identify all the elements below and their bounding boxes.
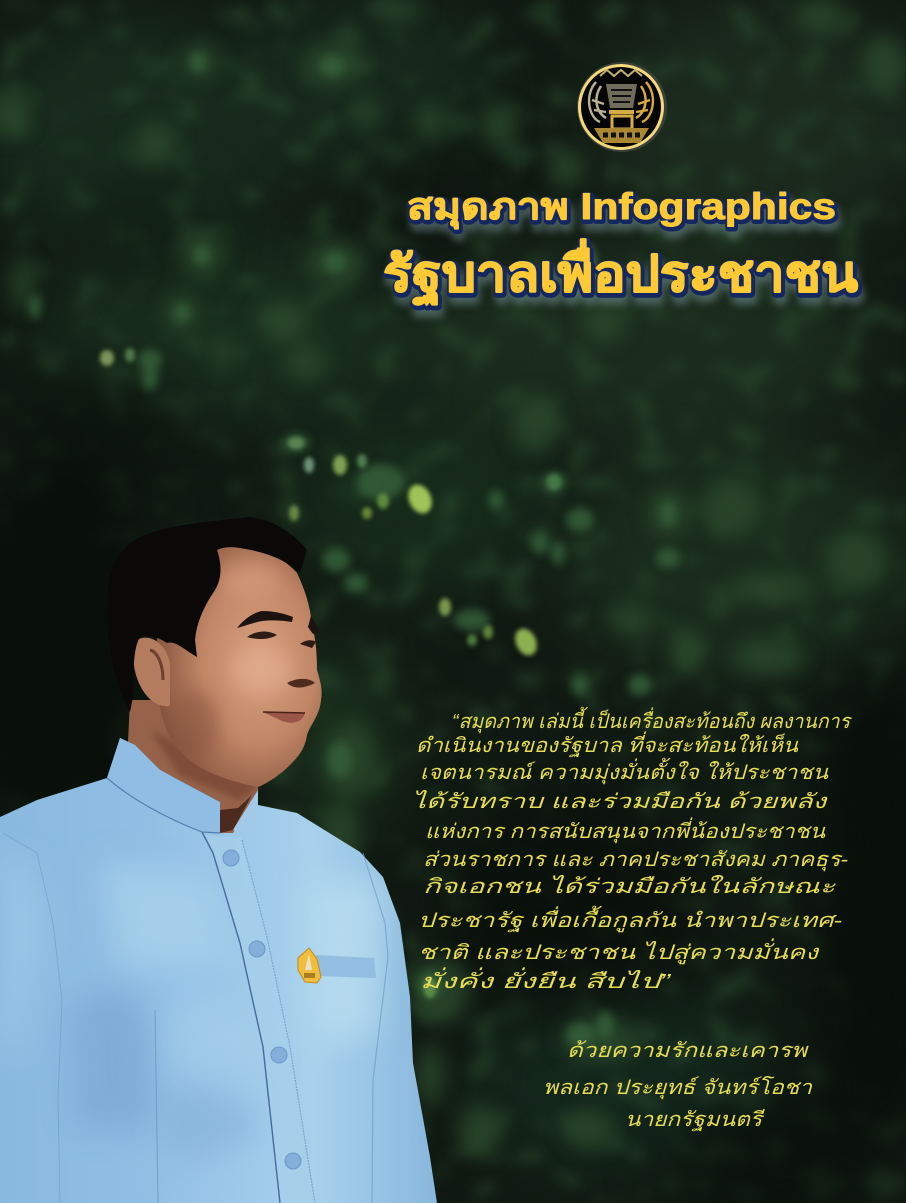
government seal logo (577, 62, 667, 152)
ear (133, 638, 170, 706)
handwritten message: มั่งคั่ง ยั่งยืน สืบไป” (420, 967, 672, 993)
signature block: ด้วยความรักและเคารพ (567, 1040, 809, 1062)
title line 1: สมุดภาพ Infographics (408, 188, 837, 232)
signature block: นายกรัฐมนตรี (625, 1109, 765, 1132)
handwritten message: ประชารัฐ เพื่อเกื้อกูลกัน นำพาประเทศ- (418, 905, 842, 933)
nose shadow (287, 679, 315, 688)
handwritten message (412, 706, 852, 993)
handwritten message: ชาติ และประชาชน ไปสู่ความมั่นคง (418, 938, 820, 965)
handwritten message: “สมุดภาพ เล่มนี้ เป็นเครื่องสะท้อนถึง ผลงานการ (452, 706, 852, 734)
handwritten message: กิจเอกชน ได้ร่วมมือกันในลักษณะ (423, 875, 837, 898)
title line 2: รัฐบาลเพื่อประชาชน (383, 239, 858, 306)
signature block: พลเอก ประยุทธ์ จันทร์โอชา (543, 1075, 813, 1100)
collar (107, 738, 258, 835)
handwritten message: เจตนารมณ์ ความมุ่งมั่นตั้งใจ ให้ประชาชน (420, 757, 829, 785)
handwritten message: ได้รับทราบ และร่วมมือกัน ด้วยพลัง (412, 790, 828, 813)
title (383, 186, 859, 308)
signature block (543, 1040, 813, 1132)
eyes (247, 631, 277, 639)
handwritten message: ดำเนินงานของรัฐบาล ที่จะสะท้อนให้เห็น (416, 731, 799, 758)
handwritten message: แห่งการ การสนับสนุนจากพี่น้องประชาชน (425, 817, 826, 844)
handwritten message: ส่วนราชการ และ ภาคประชาสังคม ภาคธุร- (423, 849, 848, 872)
neck (128, 700, 258, 833)
placket (205, 835, 315, 1203)
portrait of the prime minister (0, 517, 437, 1203)
mouth (263, 712, 305, 723)
jacket (0, 738, 437, 1203)
pocket (315, 955, 376, 978)
hair (107, 517, 307, 712)
title line 2: รัฐบาลเพื่อประชาชน (384, 241, 859, 308)
buttons (223, 850, 301, 1169)
title line 1: สมุดภาพ Infographics (407, 186, 836, 230)
eyebrows (237, 611, 293, 628)
icon: gold pin badge (298, 948, 321, 983)
head (107, 517, 322, 787)
